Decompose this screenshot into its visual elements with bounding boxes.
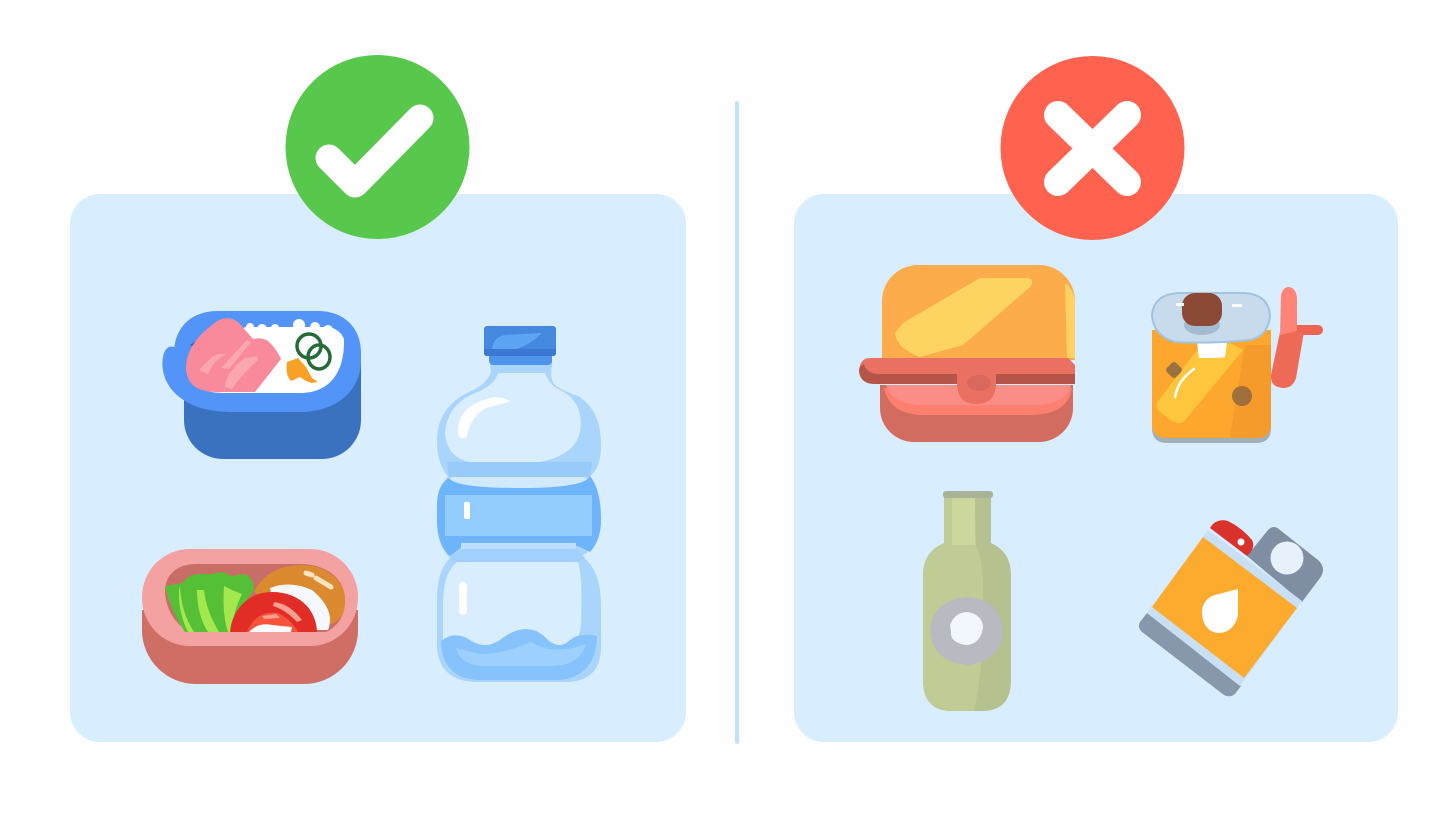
icon: blue bento box with fish and rice (162, 311, 361, 459)
rice (186, 319, 344, 393)
meat round (254, 565, 345, 625)
bottle cap (484, 326, 556, 365)
orange garnish (286, 358, 318, 383)
icon: plastic water bottle (437, 326, 601, 682)
icon: pink bento box with salad (142, 549, 358, 684)
fish slices (186, 318, 281, 392)
green rings (297, 334, 330, 369)
icon: orange lunch box with clasp (859, 265, 1075, 442)
icon: orange can with tab (1152, 287, 1323, 443)
icon: green glass bottle (923, 491, 1011, 711)
lettuce (165, 572, 254, 632)
can pull tab (1271, 287, 1323, 388)
panel: good containers (70, 194, 686, 742)
icon: tilted oil tin (1139, 520, 1323, 696)
icon: red cross badge (1000, 56, 1184, 240)
panel: bad containers (794, 194, 1398, 742)
center divider (735, 101, 739, 744)
icon: green check badge (286, 55, 470, 239)
